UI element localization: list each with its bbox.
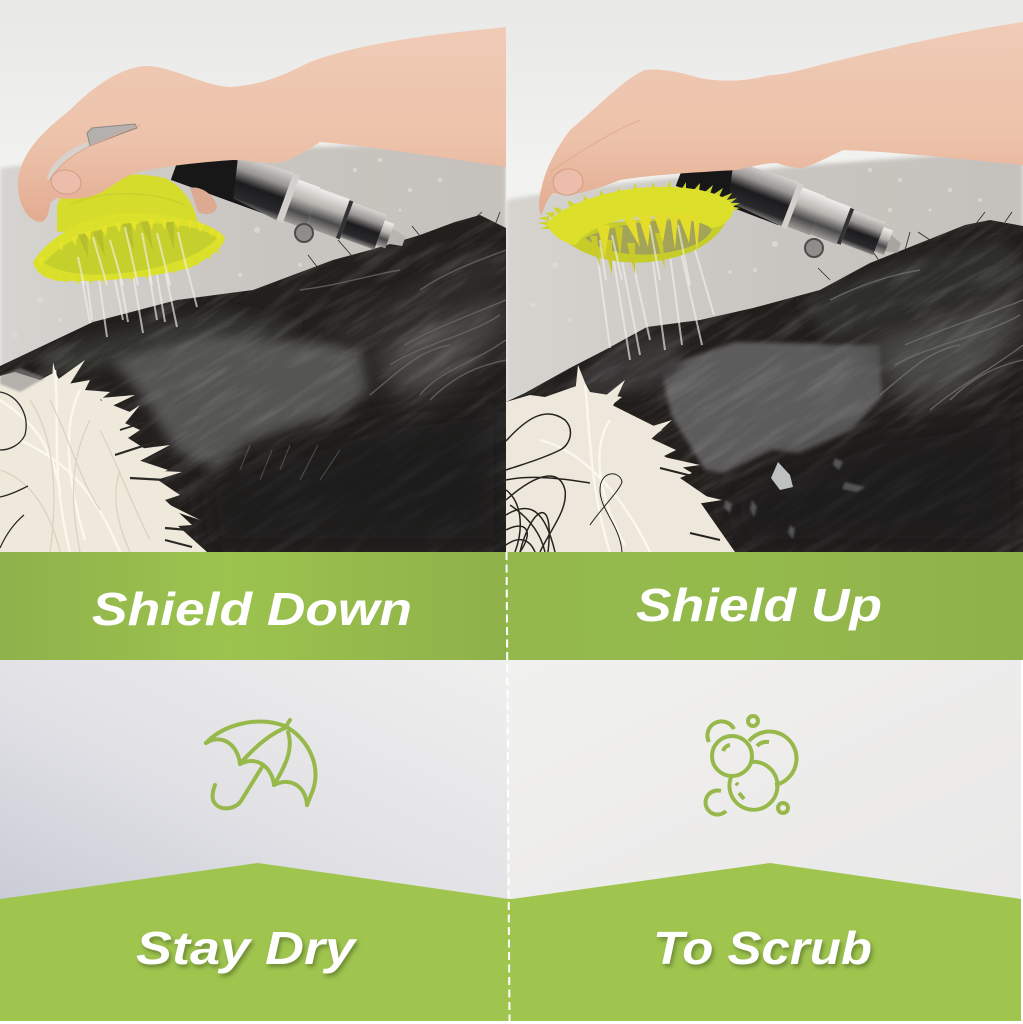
shield long bristles — [78, 221, 174, 257]
yellow shield dome — [57, 174, 198, 232]
footer chevron: to scrub: To Scrub — [653, 922, 872, 974]
fingernail — [551, 167, 585, 197]
thumb outline — [48, 125, 140, 183]
white spot in fur — [771, 462, 793, 490]
hand — [539, 22, 1023, 216]
shower head chrome handle — [170, 160, 406, 250]
dark strands in white fur — [0, 392, 192, 548]
white fur strands — [0, 370, 120, 552]
water jets in front — [78, 227, 187, 285]
shield lower lip — [560, 215, 727, 263]
hand — [18, 27, 506, 222]
panel: shield down photo — [0, 0, 506, 552]
grey transition on fur top — [0, 368, 45, 392]
panel: stay dry background — [0, 660, 507, 905]
band: shield up heading — [506, 552, 1023, 660]
fill between footer chevrons — [505, 899, 514, 1021]
dark lower fur — [720, 410, 1023, 552]
dog hair tufts on back — [308, 212, 500, 268]
shield opening — [585, 220, 712, 255]
gap between finger and thumb — [47, 142, 90, 182]
shower head chrome handle — [675, 141, 909, 270]
shower head knob — [805, 239, 823, 257]
fingernail — [50, 170, 82, 194]
feathered white fur tips — [575, 365, 722, 505]
dark strands in white fur — [506, 414, 720, 552]
shield front bristles — [597, 213, 700, 257]
wet fur highlights — [0, 218, 506, 552]
icon: umbrella — [206, 720, 315, 808]
band: shield down heading — [0, 552, 506, 660]
dog white fur — [0, 372, 207, 552]
footer chevron: stay dry: Stay Dry — [136, 922, 358, 974]
yellow shield ring — [547, 187, 734, 245]
shower head top chrome — [87, 124, 137, 146]
tub basin — [0, 144, 506, 366]
yellow shield rim spikes — [538, 180, 740, 229]
thumb outline — [550, 120, 640, 172]
shower head knob — [295, 224, 313, 242]
icon: bubbles — [706, 716, 797, 814]
feathered white fur tips — [50, 360, 200, 520]
white fur strands — [540, 385, 650, 552]
water droplets — [58, 158, 442, 320]
finger under handle — [190, 187, 217, 214]
dog hair tufts on back — [818, 212, 1012, 280]
tub basin — [506, 155, 1023, 402]
water droplets — [530, 168, 982, 322]
dark lower fur — [200, 400, 506, 552]
water jets in front — [600, 225, 690, 285]
yellow shield rim — [33, 222, 225, 282]
panel: shield up photo — [506, 0, 1023, 552]
dog white fur — [506, 383, 735, 552]
band: shield up heading: Shield Up — [636, 579, 882, 631]
tub wall background — [0, 0, 506, 170]
tub wall background — [506, 0, 1023, 202]
shield back bristles — [590, 227, 665, 275]
water jets — [598, 240, 714, 360]
dog black fur — [0, 215, 506, 552]
footer chevron: to scrub — [512, 863, 1021, 1021]
footer chevron: stay dry — [0, 863, 509, 1021]
wet fur highlights — [518, 221, 1023, 552]
dome ridge — [70, 194, 185, 205]
shield interior — [44, 224, 217, 275]
dog black fur — [506, 220, 1023, 552]
shield rim bristles — [40, 247, 220, 285]
shield bristles — [37, 219, 223, 267]
dashed divider — [506, 552, 510, 1021]
panel: to scrub background — [507, 660, 1021, 905]
water jets — [82, 268, 198, 338]
band: shield down heading: Shield Down — [92, 583, 412, 635]
wet speckles — [724, 458, 865, 539]
